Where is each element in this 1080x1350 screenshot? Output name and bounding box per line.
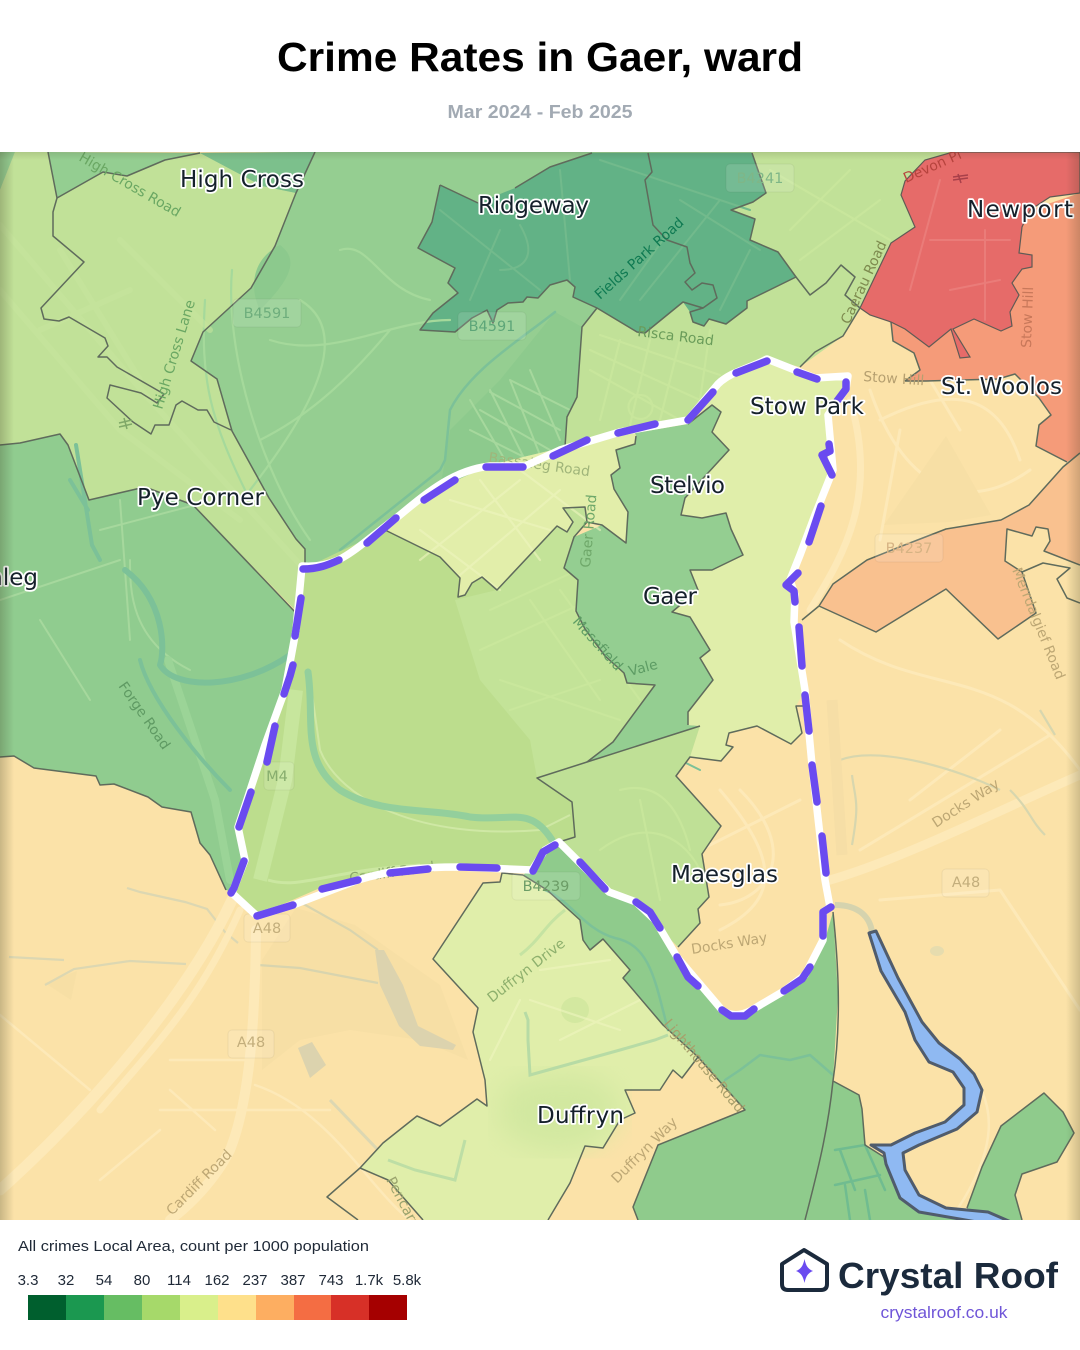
road name labels: Lighthouse Road <box>660 1016 747 1116</box>
road name labels: Risca Road <box>637 324 715 349</box>
legend scale labels: 5.8k <box>393 1272 422 1289</box>
road number badges: A48 <box>237 1035 265 1051</box>
legend title: All crimes Local Area, count per 1000 population <box>18 1238 369 1255</box>
place name labels: Maesglas <box>671 862 778 888</box>
ward boundary: white route <box>232 359 848 1015</box>
legend scale labels: 162 <box>204 1272 230 1289</box>
district: St Woolos <box>891 193 1080 462</box>
district: High Cross <box>0 152 305 613</box>
road name labels: Merrdalgief Road <box>1008 566 1068 682</box>
road number badges: A48 <box>952 875 980 891</box>
district: Duffryn <box>360 873 698 1220</box>
district: Maesglas <box>537 726 721 947</box>
district: Stelvio and Gaer <box>564 405 743 762</box>
district: river corridor green south <box>523 842 1010 1220</box>
district boundary lines <box>0 152 1074 1220</box>
legend scale labels <box>18 1272 422 1289</box>
Duffryn parkland and streams <box>388 910 668 1180</box>
ward base: west light green park area <box>232 522 655 915</box>
place name labels: High Cross <box>180 167 304 193</box>
road name labels: Docks Way <box>929 776 1003 831</box>
streets: pale Bassaleg area <box>420 470 600 590</box>
road name labels: Stow Hill <box>1019 287 1037 348</box>
road name labels: Pencarn <box>382 1174 423 1231</box>
road name labels: Devon Pl <box>901 147 964 187</box>
road number badges: A48 <box>253 921 281 937</box>
district: north forest green <box>191 152 752 568</box>
road name labels: Duffryn Drive <box>485 936 569 1006</box>
district: Stow Park pale <box>672 358 848 761</box>
legend scale labels: 32 <box>58 1272 74 1289</box>
website url: crystalroof.co.uk <box>880 1304 1008 1322</box>
road name labels: High Cross Lane <box>151 298 199 411</box>
icon: house with star <box>782 1250 827 1290</box>
legend scale labels: 387 <box>280 1272 306 1289</box>
road name labels: High Cross Road <box>76 150 183 221</box>
road name labels: Duffryn Way <box>609 1114 681 1187</box>
road name labels: Vale <box>627 657 660 680</box>
road name labels: Cardiff Road <box>348 859 436 887</box>
road name labels: Fields Park Road <box>592 215 687 303</box>
district: Pye Corner west green <box>0 434 296 892</box>
road name labels: Masefield <box>569 614 626 674</box>
road number badges: B4237 <box>886 541 932 557</box>
district: Newport <box>860 152 1080 358</box>
map edge shading <box>0 152 1080 1220</box>
roads: A48 junction and sand-area streets <box>0 380 1080 1220</box>
road number badges: B4241 <box>737 171 783 187</box>
place name labels: Stelvio <box>650 473 725 499</box>
road name labels: Gaer Road <box>578 494 600 568</box>
road name labels: Stow Hill <box>863 369 925 389</box>
road name labels: Docks Way <box>690 930 768 958</box>
area: sand shading and reservoir south-west <box>9 888 468 1150</box>
streets: north grid <box>0 160 1010 880</box>
road name labels: Cardiff Road <box>164 1147 236 1219</box>
legend scale labels: 3.3 <box>18 1272 38 1289</box>
road name labels: Forge Road <box>115 679 173 753</box>
place name labels: Gaer <box>643 584 698 610</box>
road number badges: M4 <box>266 769 288 785</box>
road name labels <box>76 147 1068 1231</box>
district: east green blob <box>965 1093 1074 1220</box>
district: Ridgeway <box>418 153 796 333</box>
district: Bassaleg Road pale <box>385 433 635 597</box>
place name labels: Stow Park <box>750 394 865 420</box>
place name labels: Pye Corner <box>137 485 265 511</box>
district: Stow Park north light green <box>565 152 960 447</box>
road number badges: B4591 <box>469 319 515 335</box>
place name labels: Duffryn <box>537 1103 624 1129</box>
road number badges: B4239 <box>523 879 569 895</box>
place name labels <box>0 167 1073 1129</box>
place name labels: Newport <box>967 197 1073 223</box>
district: orange area east <box>819 453 1080 639</box>
legend <box>18 1238 422 1320</box>
date range subtitle: Mar 2024 - Feb 2025 <box>448 101 632 122</box>
legend scale labels: 114 <box>167 1272 191 1289</box>
legend colour bar <box>28 1295 407 1320</box>
road number badges: B4591 <box>244 306 290 322</box>
residential lighter area <box>260 526 655 883</box>
water: streams and rivers through green areas <box>70 312 700 790</box>
place name labels: St. Woolos <box>941 374 1062 400</box>
title: Crime Rates in Gaer, ward <box>277 34 803 80</box>
road name labels: Caerau Road <box>838 239 891 327</box>
legend scale labels: 1.7k <box>355 1272 384 1289</box>
road name labels: Bassaleg Road <box>487 450 591 480</box>
legend scale labels: 743 <box>318 1272 344 1289</box>
district boundaries east <box>802 322 1080 639</box>
road number badges <box>228 164 989 1058</box>
ward boundary: purple dashes <box>231 361 846 1016</box>
wordmark: Crystal Roof <box>838 1255 1059 1296</box>
legend scale labels: 54 <box>96 1272 112 1289</box>
icon: rail stations <box>119 174 968 429</box>
logo: Crystal Roof <box>782 1250 1059 1322</box>
legend scale labels: 80 <box>134 1272 150 1289</box>
place name labels: Ridgeway <box>478 193 589 219</box>
legend scale labels: 237 <box>242 1272 268 1289</box>
district: top-left green corner <box>48 152 200 198</box>
river Usk <box>869 931 1011 1222</box>
